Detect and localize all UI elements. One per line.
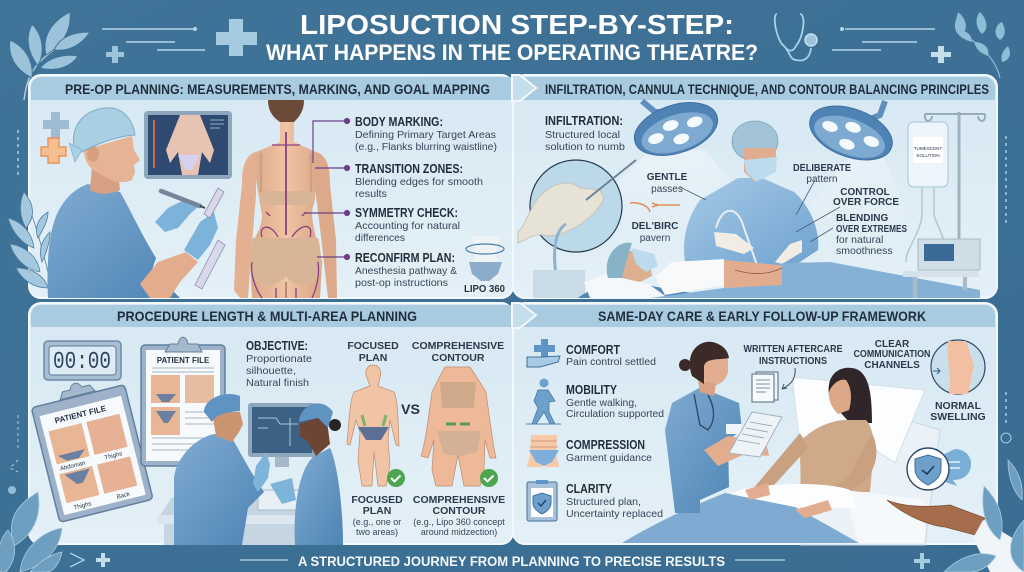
text: plan captions: PLAN [363,505,391,517]
text: transition zones: results [355,188,387,200]
illustration: caring hand [887,500,1024,572]
callout leader lines [305,118,350,260]
item: compression: Garment guidance [566,452,652,464]
panel heading: SAME-DAY CARE & EARLY FOLLOW-UP FRAMEWORK [598,308,926,324]
text: reconfirm plan [355,251,457,289]
text: technique labels: GENTLE [647,172,688,183]
illustration: surgeon with marker [48,108,225,298]
title: LIPOSUCTION STEP-BY-STEP: [300,9,734,40]
text: symmetry check: SYMMETRY CHECK: [355,206,458,220]
footer banner: A STRUCTURED JOURNEY FROM PLANNING TO PRECISE RESULTS [298,554,725,569]
illustration: tumescent solution drip: TUMESCENT [914,146,942,151]
chart: focused plan figure: FOCUSED [347,340,399,352]
icon: written document [752,368,795,402]
illustration: tilted patient file clipboard [28,372,153,522]
illustration: tumescent solution drip [903,112,985,298]
icons: check marks [387,469,498,487]
text: objective: silhouette, [246,365,296,377]
panel heading: PROCEDURE LENGTH & MULTI-AREA PLANNING [117,308,417,324]
text: technique labels: pavern [640,233,670,244]
item: compression: COMPRESSION [566,438,645,452]
header decoration left: leaves, lines and plus [10,12,257,100]
text: aftercare instructions: INSTRUCTIONS [759,355,827,367]
illustration: tilted patient file clipboard: PATIENT FILE [54,404,108,425]
illustration: tumescent solution drip: SOLUTION [916,153,940,158]
icon: plus signs [41,112,69,163]
text: technique labels: BLENDING [836,213,888,224]
item: comfort: COMFORT [566,343,620,357]
text: aftercare instructions: WRITTEN AFTERCARE [744,343,842,355]
chart: comprehensive contour figure [412,340,504,486]
icon: lipo 360 [464,236,505,295]
text: body marking: (e.g., Flanks blurring waistline) [355,141,497,153]
illustration: nurse with document [665,342,782,513]
text: objective [246,339,312,389]
text: technique labels: CONTROL [840,187,890,198]
illustration: tilted patient file clipboard: Back [116,491,132,501]
chart: focused plan figure: PLAN [359,352,387,364]
panel heading: PRE-OP PLANNING: MEASUREMENTS, MARKING, AND GOAL MAPPING [65,81,490,97]
text: technique labels: smoothness [836,245,893,257]
text: plan captions: (e.g., Lipo 360 concept [413,517,505,527]
panel: infiltration and cannula technique [512,75,997,298]
illustration: bed and patient [622,368,940,545]
illustration: tablet with body scan [144,111,232,179]
item: mobility [526,378,664,424]
text: technique labels: DELIBERATE [793,163,851,174]
text: communication channels: CHANNELS [864,360,920,371]
text: infiltration: Structured local [545,129,620,141]
illustration: tilted patient file clipboard: Thighs [73,501,92,511]
item: mobility: Circulation supported [566,408,664,420]
decoration: corner leaves and plus signs [0,130,1024,572]
arrows and leader lines [630,180,840,242]
illustration: patient back with markings [234,100,337,298]
text: technique labels: DEL'BIRC [632,221,678,232]
panel background [513,303,997,544]
item: comfort: Pain control settled [566,356,656,368]
text: reconfirm plan: Anesthesia pathway & [355,265,457,277]
text: objective: OBJECTIVE: [246,339,308,353]
text: transition zones: Blending edges for smooth [355,176,483,188]
item: compression [527,435,652,467]
text: communication channels: COMMUNICATION [854,349,930,360]
illustration: workstation [157,403,335,545]
text: infiltration: INFILTRATION: [545,114,623,128]
text: technique labels: for natural [836,234,883,246]
decoration: side leaves [8,192,52,292]
text: infiltration [545,114,625,153]
illustration: upright patient file clipboard [141,337,225,466]
panel: procedure length and multi-area planning [28,303,513,545]
item: mobility: MOBILITY [566,383,618,397]
text: transition zones: TRANSITION ZONES: [355,162,463,176]
text: plan captions [351,494,505,537]
panel heading [512,303,995,328]
illustration: cannula close-up [518,160,636,298]
text: communication channels: CLEAR [875,339,910,350]
icon: digital timer [44,341,121,380]
icon: shield and speech bubble [907,448,971,490]
illustration: two clinicians [174,394,343,545]
text: reconfirm plan: post-op instructions [355,277,448,289]
text: versus: VS [401,401,420,417]
text: transition zones [355,162,483,200]
text: technique labels: OVER EXTREMES [836,224,907,235]
icon: normal swelling close-up: NORMAL [935,400,982,412]
item: clarity: Uncertainty replaced [566,508,663,520]
text: body marking: Defining Primary Target Areas [355,129,496,141]
text: plan captions: FOCUSED [351,494,403,506]
icon: normal swelling close-up: SWELLING [930,411,986,423]
icon: normal swelling close-up [930,340,986,423]
text: technique labels [632,163,907,257]
item: clarity: CLARITY [566,482,613,496]
illustration: surgical lights [560,93,920,240]
panel heading [31,77,512,100]
chart: comprehensive contour figure: COMPREHENSIVE [412,340,504,352]
text: plan captions: (e.g., one or [353,517,401,527]
title: WHAT HAPPENS IN THE OPERATING THEATRE? [266,40,758,65]
text: plan captions: CONTOUR [433,505,486,517]
text: objective: Proportionate [246,353,312,365]
text: symmetry check: differences [355,232,405,244]
item: mobility: Gentle walking, [566,397,637,409]
chart: focused plan figure [347,340,399,486]
text: communication channels [854,339,930,371]
item: clarity: Structured plan, [566,496,641,508]
illustration: upright patient file clipboard: PATIENT FILE [157,356,210,365]
text: reconfirm plan: RECONFIRM PLAN: [355,251,455,265]
text: body marking: BODY MARKING: [355,115,443,129]
illustration: surgeon in gown [684,121,818,270]
panel heading [512,75,995,101]
text: technique labels: OVER FORCE [833,197,899,208]
text: symmetry check: Accounting for natural [355,220,460,232]
panel background [29,75,513,298]
illustration: patient on table [533,243,980,298]
illustration: tilted patient file clipboard: Abdoman [60,461,86,473]
item: clarity [527,480,663,521]
panel: same-day care and follow-up [512,303,1024,572]
text: plan captions: two areas) [356,527,398,537]
title [266,9,758,65]
illustration: tilted patient file clipboard: Thighs [104,451,123,462]
text: aftercare instructions [744,343,842,367]
icon: lipo 360: LIPO 360 [464,284,505,295]
text: symmetry check [355,206,460,244]
panel background [513,75,997,298]
icon: digital timer: 00:00 [53,349,111,376]
panel: pre-op planning [8,75,513,298]
text: technique labels: passes [651,184,683,195]
text: objective: Natural finish [246,377,309,389]
item: comfort [527,339,656,368]
panel background [29,303,513,544]
text: plan captions: COMPREHENSIVE [413,494,505,506]
panel heading [31,305,512,327]
text: plan captions: around midzection) [421,527,497,537]
text: technique labels: pattern [806,174,838,185]
header decoration right: stethoscope, lines and leaves [775,12,1010,78]
text: infiltration: solution to numb [545,141,625,153]
text: body marking [355,115,497,153]
chart: comprehensive contour figure: CONTOUR [432,352,485,364]
